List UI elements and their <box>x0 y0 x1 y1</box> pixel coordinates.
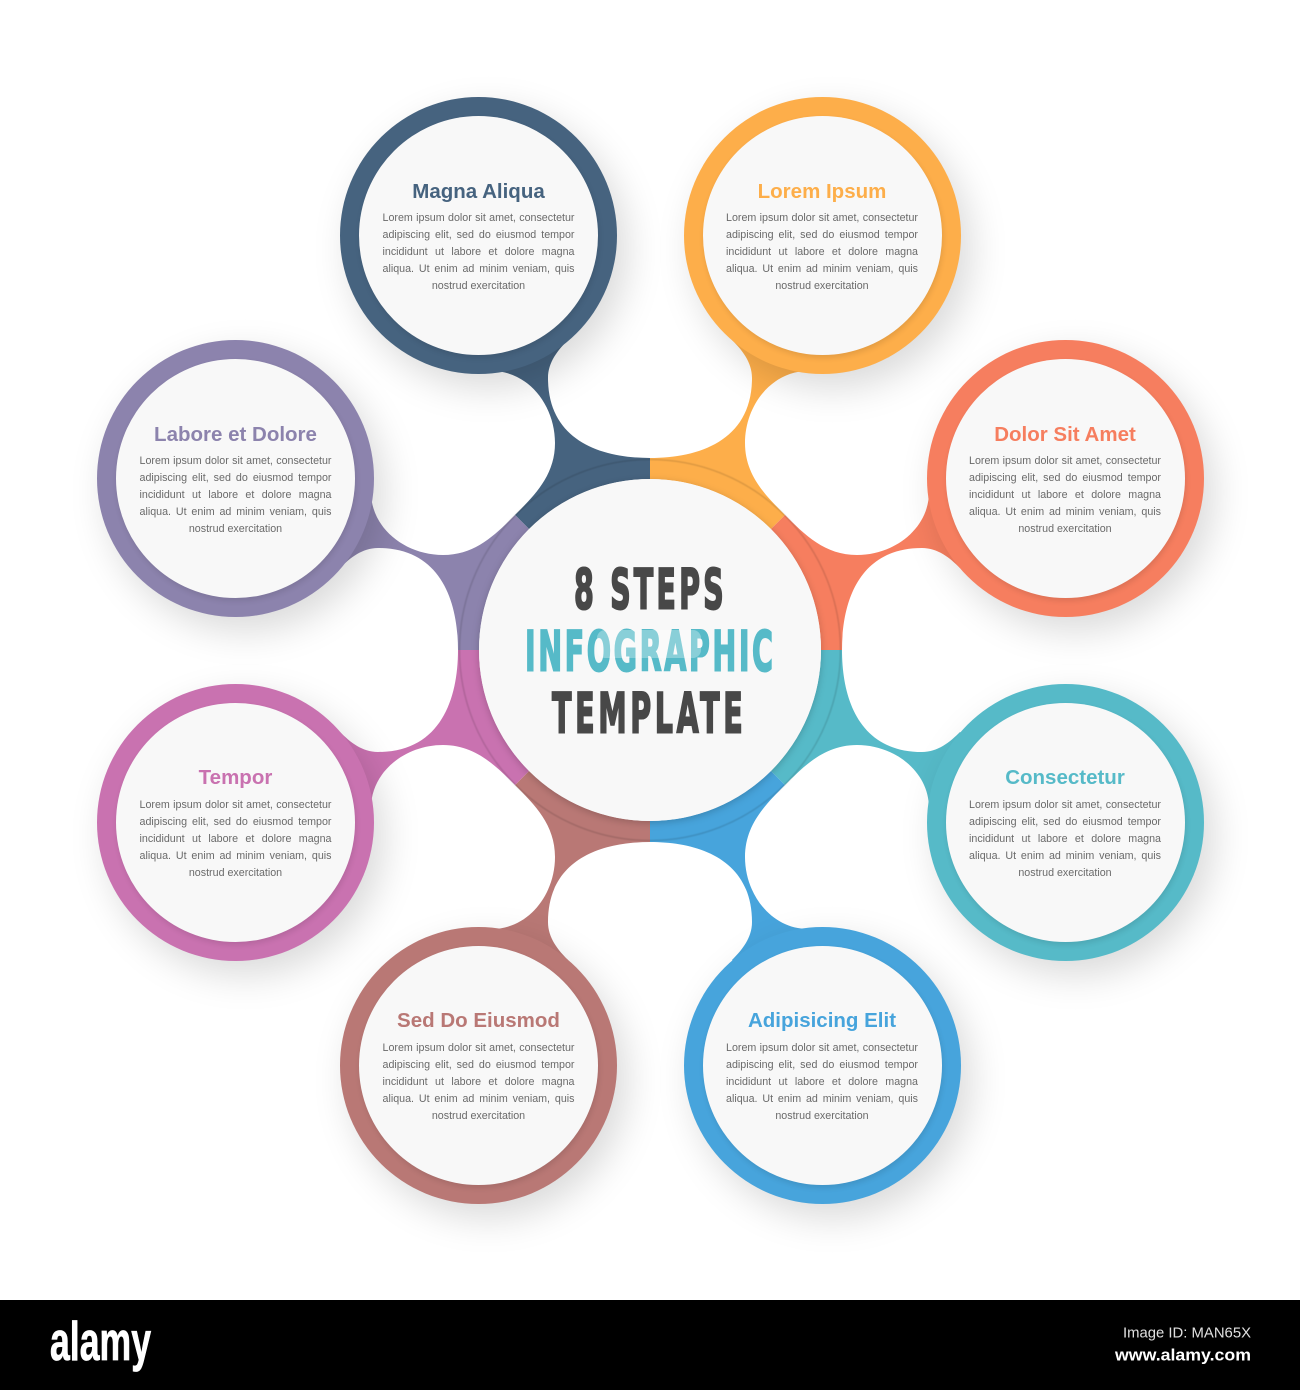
panel: Tempor: Lorem ipsum dolor sit amet, consectetur <box>140 798 332 810</box>
panel: Tempor: Tempor <box>199 766 272 789</box>
heading: TEMPLATE: TEMPLATE <box>552 683 746 747</box>
panel: Lorem Ipsum: aliqua. Ut enim ad minim veniam, quis <box>726 263 918 275</box>
panel: Dolor Sit Amet: Lorem ipsum dolor sit amet, consectetur <box>969 455 1161 467</box>
panel: Labore et Dolore: adipiscing elit, sed do eiusmod tempor <box>140 472 332 484</box>
panel: Dolor Sit Amet: Dolor Sit Amet <box>994 423 1136 446</box>
panel: Sed Do Eiusmod: aliqua. Ut enim ad minim veniam, quis <box>382 1092 574 1104</box>
panel: Adipisicing Elit: Lorem ipsum dolor sit amet, consectetur <box>726 1042 918 1054</box>
panel: Labore et Dolore: Labore et Dolore <box>154 423 317 446</box>
panel: Adipisicing Elit: incididunt ut labore et dolore magna <box>726 1076 918 1088</box>
panel: Lorem Ipsum: incididunt ut labore et dolore magna <box>726 246 918 258</box>
panel: Sed Do Eiusmod <box>340 926 617 1204</box>
panel: Sed Do Eiusmod: Lorem ipsum dolor sit amet, consectetur <box>382 1042 574 1054</box>
panel: Tempor: nostrud exercitation <box>189 866 282 878</box>
panel: Labore et Dolore: Lorem ipsum dolor sit amet, consectetur <box>140 455 332 467</box>
connector: Magna Aliqua <box>478 235 650 529</box>
panel: Sed Do Eiusmod: incididunt ut labore et dolore magna <box>382 1076 574 1088</box>
panel: Tempor: aliqua. Ut enim ad minim veniam, quis <box>140 850 332 862</box>
panel: Magna Aliqua: aliqua. Ut enim ad minim veniam, quis <box>382 263 574 275</box>
connector: Consectetur <box>771 650 1065 822</box>
panel: Adipisicing Elit: Adipisicing Elit <box>748 1009 896 1032</box>
panel: Adipisicing Elit: nostrud exercitation <box>775 1110 869 1122</box>
panel: Lorem Ipsum: Lorem ipsum dolor sit amet, consectetur <box>726 212 918 224</box>
panel: Consectetur: adipiscing elit, sed do eiusmod tempor <box>969 816 1161 828</box>
panel: Lorem Ipsum: Lorem Ipsum <box>758 180 886 203</box>
panel: Labore et Dolore: aliqua. Ut enim ad minim veniam, quis <box>140 506 332 518</box>
panel: Magna Aliqua: Lorem ipsum dolor sit amet, consectetur <box>382 212 574 224</box>
panel: Lorem Ipsum: adipiscing elit, sed do eiusmod tempor <box>726 229 918 241</box>
panel: Magna Aliqua: adipiscing elit, sed do eiusmod tempor <box>382 229 574 241</box>
panel: Magna Aliqua <box>340 97 617 374</box>
panel: Dolor Sit Amet: aliqua. Ut enim ad minim veniam, quis <box>969 506 1161 518</box>
heading: 8 STEPS: 8 STEPS <box>574 559 727 623</box>
panel: Lorem Ipsum <box>684 97 960 374</box>
panel: Consectetur: Consectetur <box>1005 766 1125 789</box>
connector: Labore et Dolore <box>235 478 529 650</box>
panel: Dolor Sit Amet <box>926 340 1204 617</box>
panel: Consectetur: nostrud exercitation <box>1018 866 1112 878</box>
panel: Sed Do Eiusmod: adipiscing elit, sed do eiusmod tempor <box>382 1058 574 1070</box>
panel: Dolor Sit Amet: incididunt ut labore et dolore magna <box>969 489 1161 501</box>
connector: Tempor <box>235 650 529 822</box>
website: www.alamy.com <box>1114 1346 1251 1364</box>
panel: Labore et Dolore: nostrud exercitation <box>189 523 282 535</box>
panel: Magna Aliqua: Magna Aliqua <box>412 180 545 203</box>
connector: Sed Do Eiusmod <box>478 771 650 1065</box>
image id: Image ID: MAN65X <box>1123 1324 1251 1342</box>
panel: Consectetur: aliqua. Ut enim ad minim veniam, quis <box>969 850 1161 862</box>
connector: Lorem Ipsum <box>650 235 822 529</box>
panel: Labore et Dolore <box>97 340 374 617</box>
central hub <box>479 479 821 821</box>
connector: Adipisicing Elit <box>650 771 822 1065</box>
panel: Tempor: incididunt ut labore et dolore magna <box>140 832 332 844</box>
panel: Consectetur <box>926 684 1204 960</box>
panel: Dolor Sit Amet: adipiscing elit, sed do eiusmod tempor <box>969 472 1161 484</box>
connector: Dolor Sit Amet <box>771 478 1065 650</box>
panel: Tempor <box>97 684 374 960</box>
panel: Adipisicing Elit <box>684 926 960 1204</box>
panel: Magna Aliqua: incididunt ut labore et dolore magna <box>382 246 574 258</box>
panel: Sed Do Eiusmod: Sed Do Eiusmod <box>397 1009 560 1032</box>
panel: Magna Aliqua: nostrud exercitation <box>432 280 525 292</box>
panel: Tempor: adipiscing elit, sed do eiusmod tempor <box>140 816 332 828</box>
panel: Sed Do Eiusmod: nostrud exercitation <box>432 1110 525 1122</box>
logo: alamy: alamy <box>50 1310 151 1372</box>
panel: Consectetur: Lorem ipsum dolor sit amet, consectetur <box>969 798 1161 810</box>
panel: Adipisicing Elit: aliqua. Ut enim ad minim veniam, quis <box>726 1092 918 1104</box>
panel: Dolor Sit Amet: nostrud exercitation <box>1018 523 1112 535</box>
footer bar: alamy <box>0 1300 1300 1390</box>
heading: INFOGRAPHIC: INFOGRAPHIC <box>525 621 776 685</box>
panel: Adipisicing Elit: adipiscing elit, sed do eiusmod tempor <box>726 1058 918 1070</box>
panel: Consectetur: incididunt ut labore et dolore magna <box>969 832 1161 844</box>
panel: Labore et Dolore: incididunt ut labore et dolore magna <box>140 489 332 501</box>
panel: Lorem Ipsum: nostrud exercitation <box>775 280 869 292</box>
